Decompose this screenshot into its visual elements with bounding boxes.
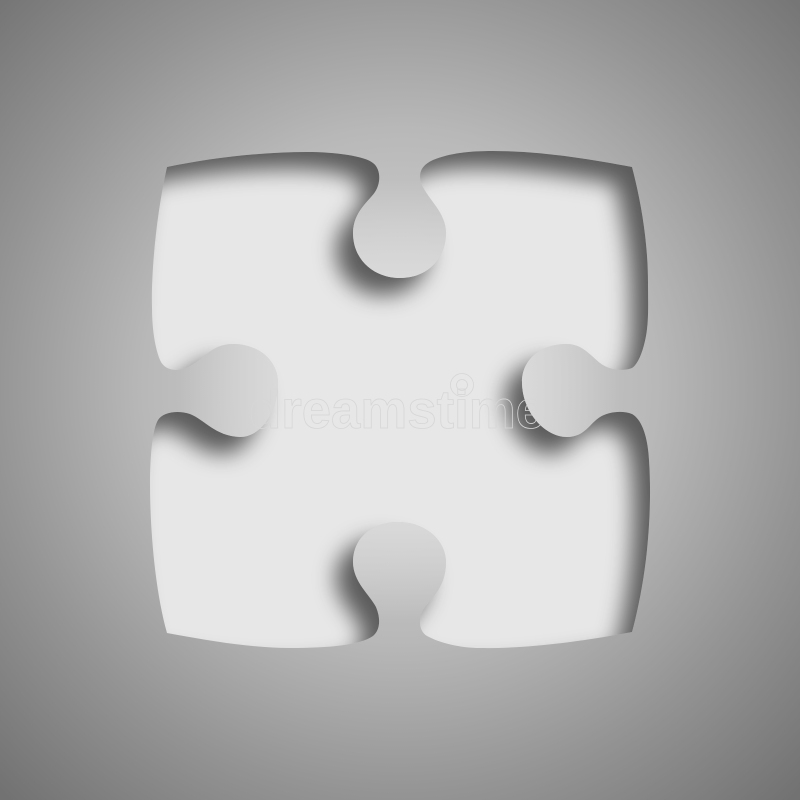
watermark: dreamstime: [249, 380, 545, 440]
knob: bottom: [353, 522, 446, 592]
knob: left: [206, 344, 278, 437]
knob: right: [522, 344, 584, 437]
panel: paper knobs: [206, 218, 584, 592]
inner shadow cast by the paper edge: [150, 151, 650, 648]
panel: puzzle-shaped hole: [150, 151, 650, 648]
knob: top: [353, 218, 446, 278]
